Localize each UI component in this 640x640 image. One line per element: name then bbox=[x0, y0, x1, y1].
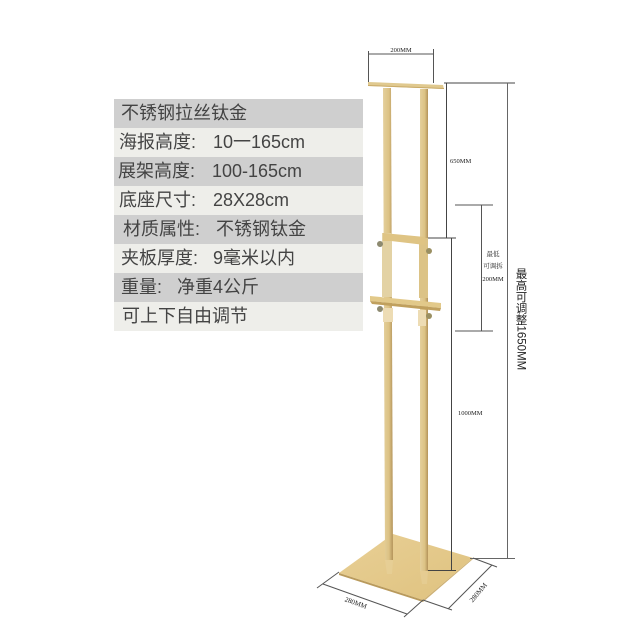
row: base size: 底座尺寸: bbox=[119, 190, 196, 210]
icon: upper clamp bbox=[377, 233, 432, 298]
row: material: 不锈钢钛金 bbox=[216, 219, 306, 239]
dimension: top width 200MM: 200MM bbox=[390, 47, 412, 54]
dimension: top width 200MM bbox=[368, 47, 434, 83]
row: weight bbox=[114, 273, 363, 302]
row: board thickness: 夹板厚度: bbox=[121, 248, 198, 268]
row: adjustable: 可上下自由调节 bbox=[122, 306, 248, 326]
dimension: adjustable 200MM: 200MM bbox=[482, 276, 504, 283]
dimension: adjustable 200MM: 最低 bbox=[486, 249, 500, 258]
icon: lower clamp bbox=[370, 296, 441, 326]
icon: right pole bbox=[420, 89, 428, 571]
spec table bbox=[114, 99, 363, 331]
row: material bbox=[114, 215, 363, 244]
dimension: base width 280MM: 280MM bbox=[344, 595, 369, 611]
row: stand height bbox=[114, 157, 363, 186]
row: poster height: 海报高度: bbox=[119, 132, 196, 152]
icon: top bar bbox=[368, 82, 444, 89]
row: base size: 28X28cm bbox=[213, 190, 289, 210]
dimension: total height: 最高可调整1650MM bbox=[514, 268, 527, 370]
row: board thickness: 9毫米以内 bbox=[213, 248, 295, 268]
dimension: 650MM: 650MM bbox=[450, 158, 472, 165]
icon: gold square base bbox=[339, 534, 473, 602]
dimension: 1000MM bbox=[428, 238, 483, 570]
row: material finish: 不锈钢拉丝钛金 bbox=[121, 103, 247, 123]
row: stand height: 100-165cm bbox=[212, 161, 302, 181]
icon: left pole bbox=[383, 88, 393, 560]
dimension: adjustable 200MM bbox=[455, 205, 504, 331]
row: weight: 净重4公斤 bbox=[177, 277, 259, 297]
row: material: 材质属性: bbox=[123, 219, 200, 239]
dimension: base depth 280MM bbox=[423, 558, 497, 610]
dimension: 650MM bbox=[444, 83, 515, 238]
dimension: total height bbox=[470, 83, 527, 558]
row: stand height: 展架高度: bbox=[118, 161, 195, 181]
dimension: 1000MM: 1000MM bbox=[458, 410, 483, 417]
row: material finish bbox=[114, 99, 363, 128]
dimension: base width 280MM bbox=[317, 572, 423, 617]
dimension: base depth 280MM: 280MM bbox=[468, 581, 489, 604]
row: poster height: 10一165cm bbox=[213, 132, 305, 152]
dimension: adjustable 200MM: 可调拆 bbox=[483, 261, 503, 270]
row: poster height bbox=[114, 128, 363, 157]
row: adjustable bbox=[114, 302, 363, 331]
row: base size bbox=[114, 186, 363, 215]
row: weight: 重量: bbox=[121, 277, 162, 297]
row: board thickness bbox=[114, 244, 363, 273]
